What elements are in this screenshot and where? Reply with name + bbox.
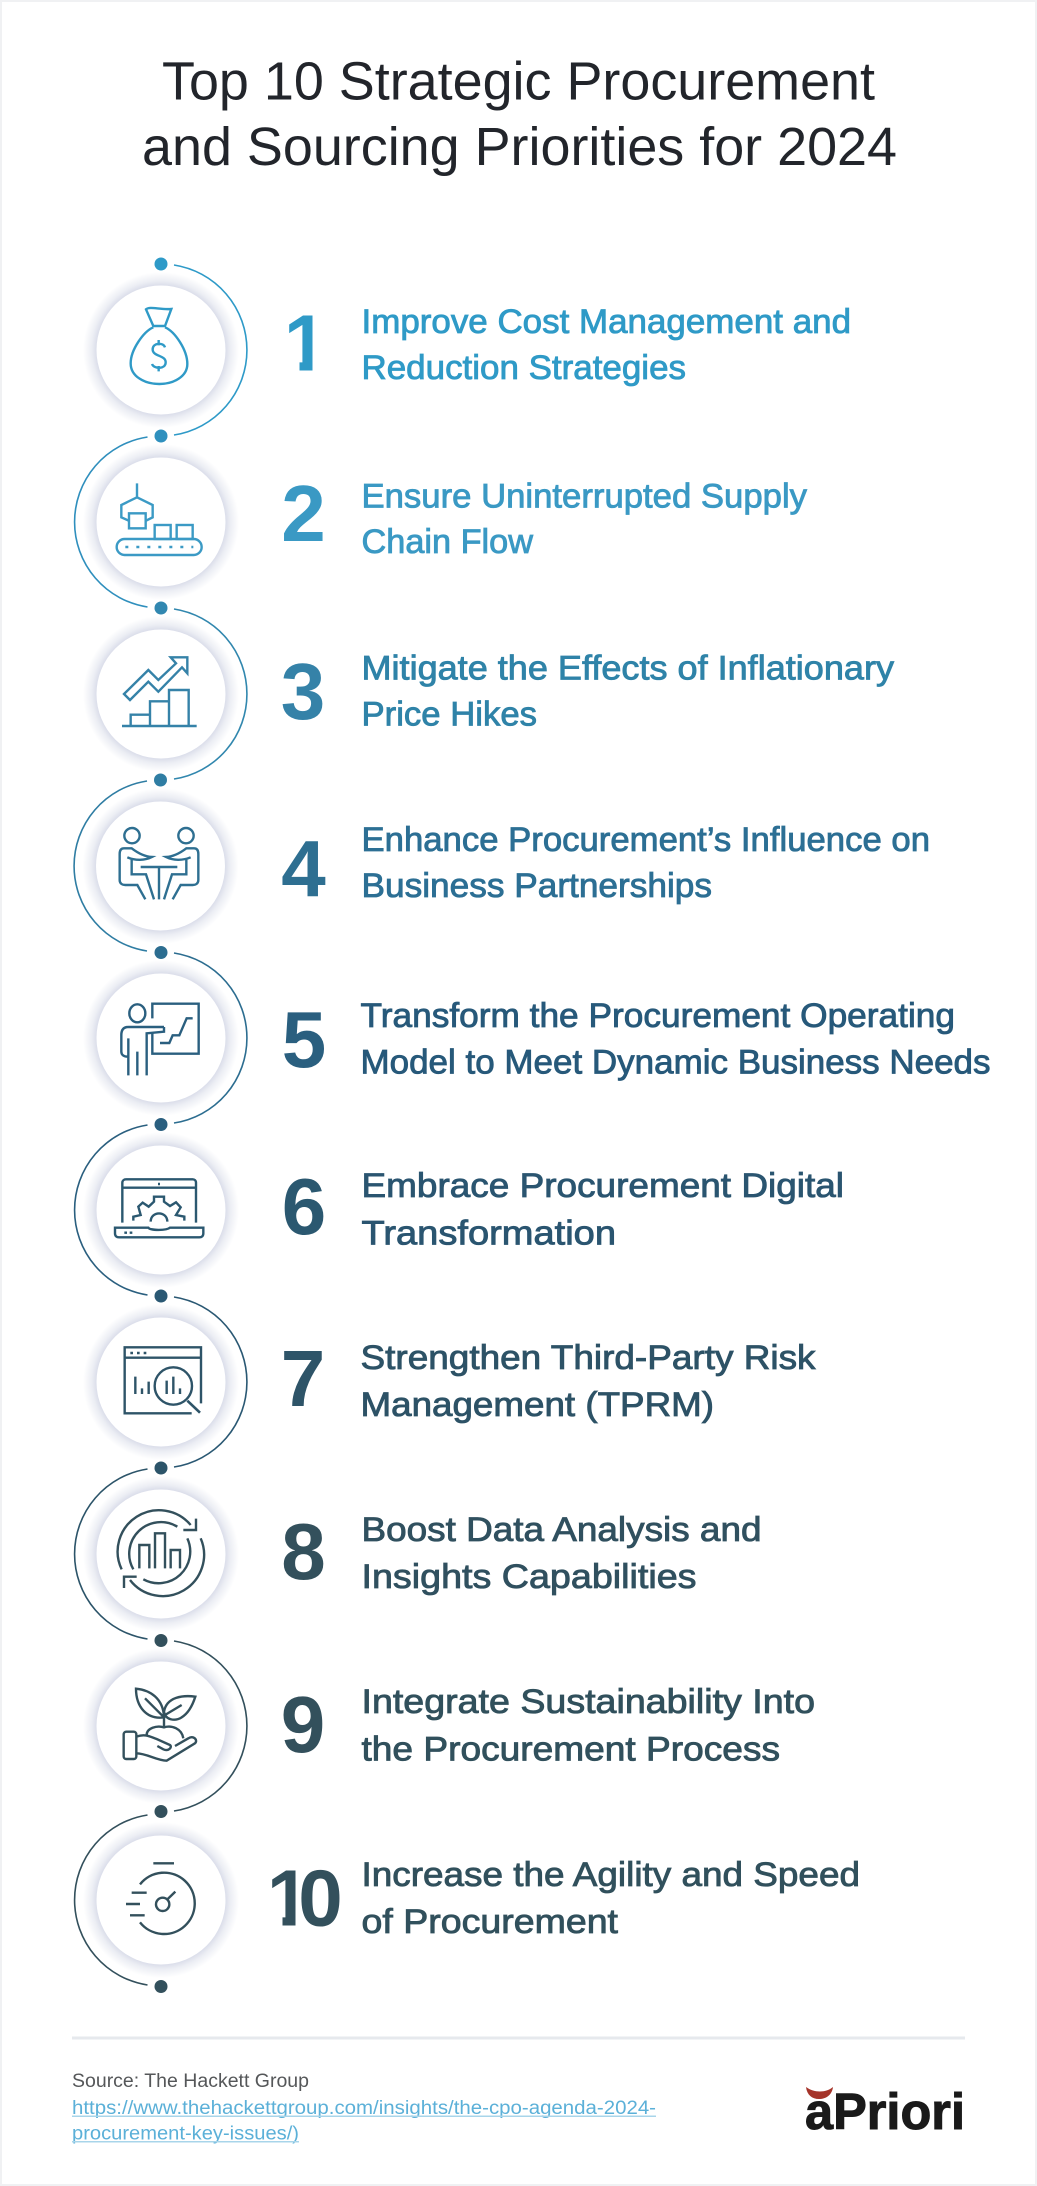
icon disc 4 xyxy=(82,788,238,944)
icon: conveyor robot xyxy=(117,483,202,555)
title: and Sourcing Priorities for 2024 xyxy=(142,117,897,177)
number 3: 3 xyxy=(281,647,325,736)
icon disc 9 xyxy=(83,1648,239,1804)
icon: stopwatch xyxy=(126,1863,195,1934)
icon: browser analytics xyxy=(125,1347,201,1413)
step 2 xyxy=(75,430,807,607)
dot 6 xyxy=(154,1118,168,1131)
number 10: 1 xyxy=(267,1854,311,1943)
icon: hand holding plant xyxy=(124,1689,196,1761)
step 10 xyxy=(75,1805,860,1993)
label 3: Price Hikes xyxy=(362,696,537,734)
icon: growth chart xyxy=(122,657,197,726)
label 1: Reduction Strategies xyxy=(362,349,686,387)
logo wordmark: aPriori xyxy=(805,2083,965,2140)
icon disc 7 xyxy=(83,1304,239,1460)
label 3: Mitigate the Effects of Inflationary xyxy=(362,650,894,688)
title xyxy=(142,52,897,177)
icon: presenter at board xyxy=(121,1004,199,1075)
dot 2 xyxy=(154,430,168,442)
icon: laptop with gear xyxy=(115,1179,203,1237)
label 9: Integrate Sustainability Into xyxy=(362,1683,815,1721)
label 7: Strengthen Third-Party Risk xyxy=(360,1339,817,1377)
connector arc 10 xyxy=(75,1815,148,1985)
connector arc 6 xyxy=(75,1125,148,1295)
dot 5 xyxy=(154,946,168,959)
connector arc 3 xyxy=(174,609,247,779)
label 4 xyxy=(362,821,930,905)
label 8: Boost Data Analysis and xyxy=(362,1511,762,1549)
dot 10 bottom xyxy=(154,1980,168,1993)
source link: https://www.thehackettgroup.com/insights/the-cpo-agenda-2024- xyxy=(72,2098,656,2119)
number 10 xyxy=(272,1870,340,1926)
connector arc 4 xyxy=(74,781,147,951)
step 5 xyxy=(83,946,990,1123)
icon disc 6 xyxy=(83,1132,239,1288)
label 9: the Procurement Process xyxy=(362,1730,780,1768)
icon disc 3 xyxy=(83,616,239,772)
connector arc 8 xyxy=(75,1469,148,1639)
label 4: Enhance Procurement’s Influence on xyxy=(362,821,930,859)
step 9 xyxy=(83,1634,815,1811)
connector arc 1 xyxy=(174,265,247,435)
label 7: Management (TPRM) xyxy=(360,1386,714,1424)
label 8 xyxy=(362,1511,762,1596)
dot 1 xyxy=(154,258,168,270)
step 3 xyxy=(83,602,894,779)
number 9: 9 xyxy=(281,1680,325,1769)
dot 7 xyxy=(154,1290,168,1302)
label 4: Business Partnerships xyxy=(362,867,712,905)
icon disc 5 xyxy=(83,960,239,1116)
connector arc 5 xyxy=(174,953,247,1123)
label 9 xyxy=(362,1683,815,1768)
label 3 xyxy=(362,650,894,734)
label 1 xyxy=(362,303,851,387)
icon disc 8 xyxy=(83,1476,239,1632)
logo: aPriori xyxy=(805,2083,965,2140)
dot 3 xyxy=(154,602,168,614)
number 2: 2 xyxy=(281,469,326,558)
number 1: 1 xyxy=(284,299,328,388)
label 10: of Procurement xyxy=(362,1903,619,1941)
number 8: 8 xyxy=(281,1507,326,1596)
label 2 xyxy=(362,478,807,561)
label 10: Increase the Agility and Speed xyxy=(362,1856,860,1894)
dot 4 xyxy=(154,774,167,786)
icon disc 1 xyxy=(83,272,239,428)
logo smile xyxy=(806,2087,833,2099)
label 1: Improve Cost Management and xyxy=(362,303,851,341)
icon: money bag xyxy=(131,308,187,384)
connector arc 7 xyxy=(174,1297,247,1467)
label 7 xyxy=(360,1339,817,1424)
icon: two people at table xyxy=(120,828,198,899)
icon disc 10 xyxy=(83,1822,239,1978)
dot 9 xyxy=(154,1634,168,1647)
label 6: Transformation xyxy=(362,1214,616,1252)
connector arc 2 xyxy=(75,437,148,607)
source text: Source: The Hackett Group xyxy=(72,2071,309,2092)
step 7 xyxy=(83,1290,817,1467)
label 10 xyxy=(362,1856,860,1941)
number 4: 4 xyxy=(281,824,326,913)
label 5: Model to Meet Dynamic Business Needs xyxy=(360,1044,990,1082)
label 6 xyxy=(362,1167,844,1252)
step 4 xyxy=(74,774,930,951)
number 5: 5 xyxy=(282,995,326,1084)
label 2: Chain Flow xyxy=(362,523,533,561)
number 7: 7 xyxy=(281,1334,325,1423)
label 6: Embrace Procurement Digital xyxy=(362,1167,844,1205)
connector arc 9 xyxy=(174,1641,247,1811)
icon disc 2 xyxy=(83,444,239,600)
step 6 xyxy=(75,1118,844,1295)
dot 10 top xyxy=(154,1805,168,1818)
icon: cycle bar chart xyxy=(118,1510,204,1596)
number 10: 0 xyxy=(298,1854,343,1943)
label 5: Transform the Procurement Operating xyxy=(360,997,955,1035)
step 8 xyxy=(75,1462,761,1639)
source link: procurement-key-issues/) xyxy=(72,2124,299,2144)
dot 8 xyxy=(154,1462,168,1474)
label 8: Insights Capabilities xyxy=(362,1558,696,1596)
label 2: Ensure Uninterrupted Supply xyxy=(362,478,807,516)
label 5 xyxy=(360,997,990,1082)
number 6: 6 xyxy=(282,1162,326,1251)
title: Top 10 Strategic Procurement xyxy=(162,52,875,112)
source link xyxy=(72,2098,656,2144)
step 1 xyxy=(83,258,851,435)
